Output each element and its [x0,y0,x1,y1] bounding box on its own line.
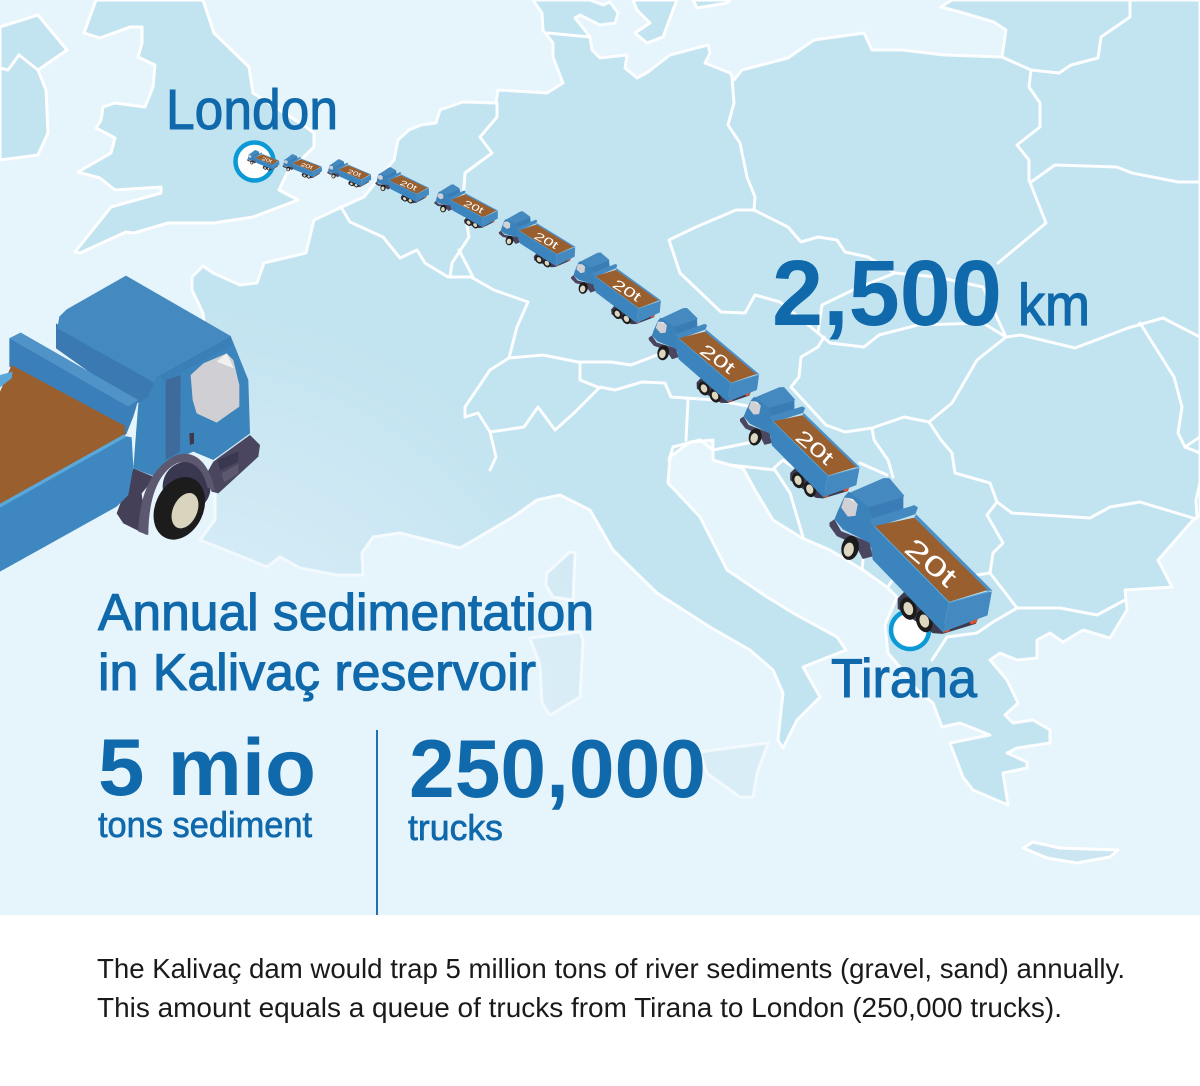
caption text: The Kalivaç dam would trap 5 million tons of river sediments (gravel, sand) annually. [97,953,1125,984]
divider line between statistics [376,730,378,915]
land: Ireland [0,15,67,160]
island: Crete [1023,842,1118,863]
truck 1 [245,144,281,176]
soft fade over the lower left of the map [0,250,800,915]
truck 5 [431,176,501,237]
island: Sardinia [530,632,583,715]
label: Tirana: Tirana [831,647,977,709]
truck 9: 20t [791,426,838,470]
island: Corsica [546,552,575,600]
heading: Annual sedimentation in Kalivaç reservoir [98,584,594,702]
truck 3 [325,152,374,195]
caption text: This amount equals a queue of trucks from Tirana to London (250,000 trucks). [97,992,1062,1023]
truck 8 [647,304,761,407]
truck 5: 20t [462,198,487,215]
cab [56,276,250,477]
statistic: 5 mio tons sediment: tons sediment [98,804,312,845]
queue of trucks from Tirana to London [245,144,993,634]
truck 6: 20t [531,231,561,252]
truck 4 [372,159,432,211]
statistic: 250,000 trucks: trucks [408,807,503,848]
truck 9 [740,387,860,499]
truck 10 [829,478,993,634]
distance value: 2,500 km: 2,500 [772,241,1002,345]
map of Europe [0,0,1200,863]
statistic: 250,000 trucks: 250,000 [409,722,706,815]
truck 6 [496,204,578,275]
truck 1: 20t [261,156,274,164]
land: Great Britain [75,0,314,253]
distance value: 2,500 km: km [1018,273,1090,338]
heading: Annual sedimentation in Kalivaç reservoir: in Kalivaç reservoir [98,644,536,702]
truck 2 [280,147,324,186]
large truck illustration at left [0,276,260,572]
land: Sweden [633,0,677,43]
truck 3: 20t [346,168,363,179]
truck 7: 20t [610,276,645,305]
truck 10: 20t [899,531,964,594]
borders between countries [0,0,1200,660]
land: Baltic island [693,0,730,8]
land: continental Europe [192,0,1200,805]
heading: Annual sedimentation in Kalivaç reservoir: Annual sedimentation [98,584,594,642]
truck 8: 20t [696,340,739,378]
window [191,353,239,423]
truck 7 [569,247,663,331]
marker: Tirana [891,611,929,649]
truck bed with sediment [0,333,138,572]
truck 4: 20t [398,179,420,193]
island: Sicily [700,743,768,797]
label: London: London [166,78,338,142]
bumper [117,435,260,535]
truck 2: 20t [299,162,314,171]
caption text [97,953,1125,1023]
wheel [144,469,215,548]
statistic: 5 mio tons sediment: 5 mio [98,723,316,813]
white footer band [0,915,1200,1086]
marker: London [236,142,274,180]
